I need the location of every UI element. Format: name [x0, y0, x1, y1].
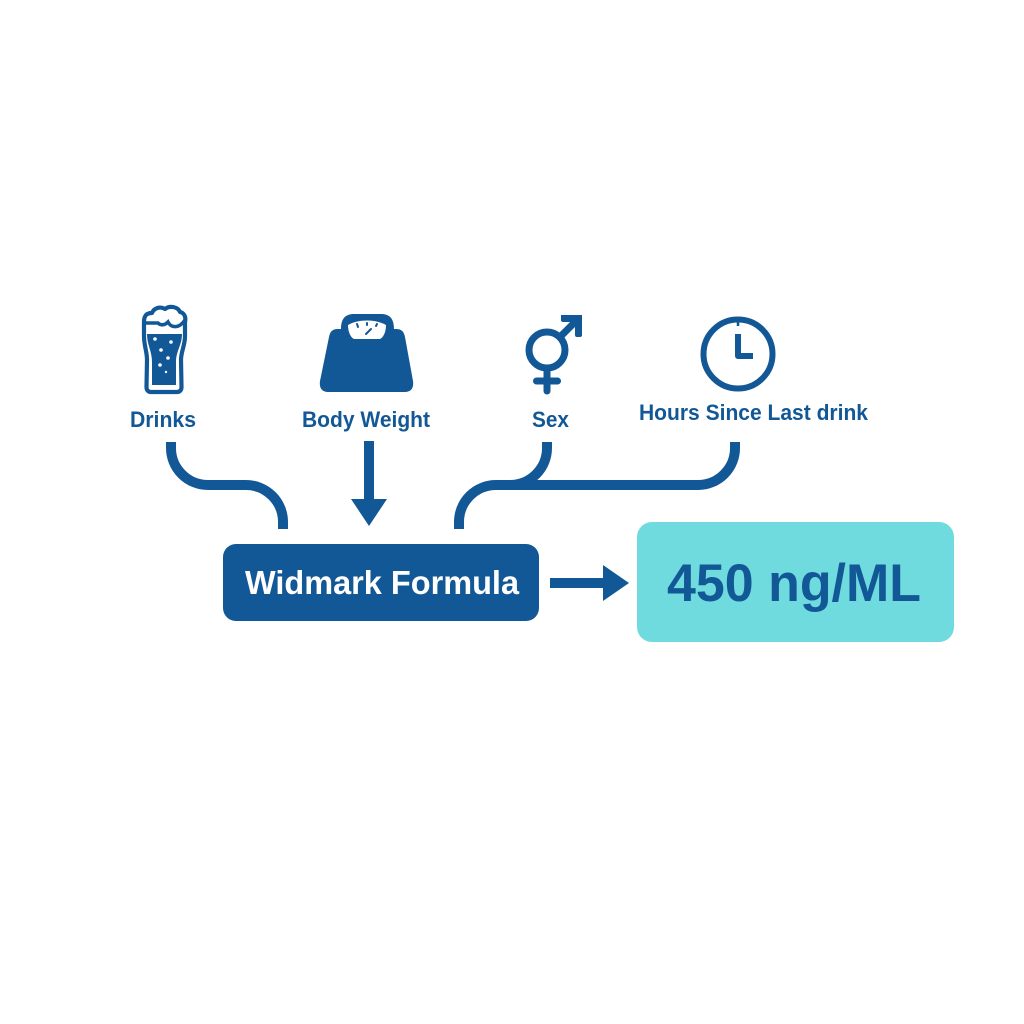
- icon: beer glass: [144, 307, 185, 392]
- box: Widmark Formula: [223, 544, 539, 621]
- box: result 450 ng/ML: [637, 522, 954, 642]
- connector: sex and hours to formula: [459, 442, 735, 529]
- box: result 450 ng/ML: 450 ng/ML: [667, 554, 921, 613]
- arrow: body weight to formula: [351, 441, 387, 526]
- label: Body Weight: Body Weight: [302, 407, 431, 432]
- label: Hours Since Last drink: Hours Since Last drink: [639, 400, 869, 425]
- icon: clock: [704, 320, 772, 388]
- label: Drinks: Drinks: [130, 407, 196, 432]
- arrow: formula to result: [550, 565, 629, 601]
- icon: weighing scale: [320, 314, 413, 392]
- box: Widmark Formula: Widmark Formula: [245, 564, 520, 601]
- label: Sex: Sex: [532, 407, 570, 432]
- icon: sex symbol: [529, 315, 582, 391]
- connector: drinks to formula: [171, 442, 283, 529]
